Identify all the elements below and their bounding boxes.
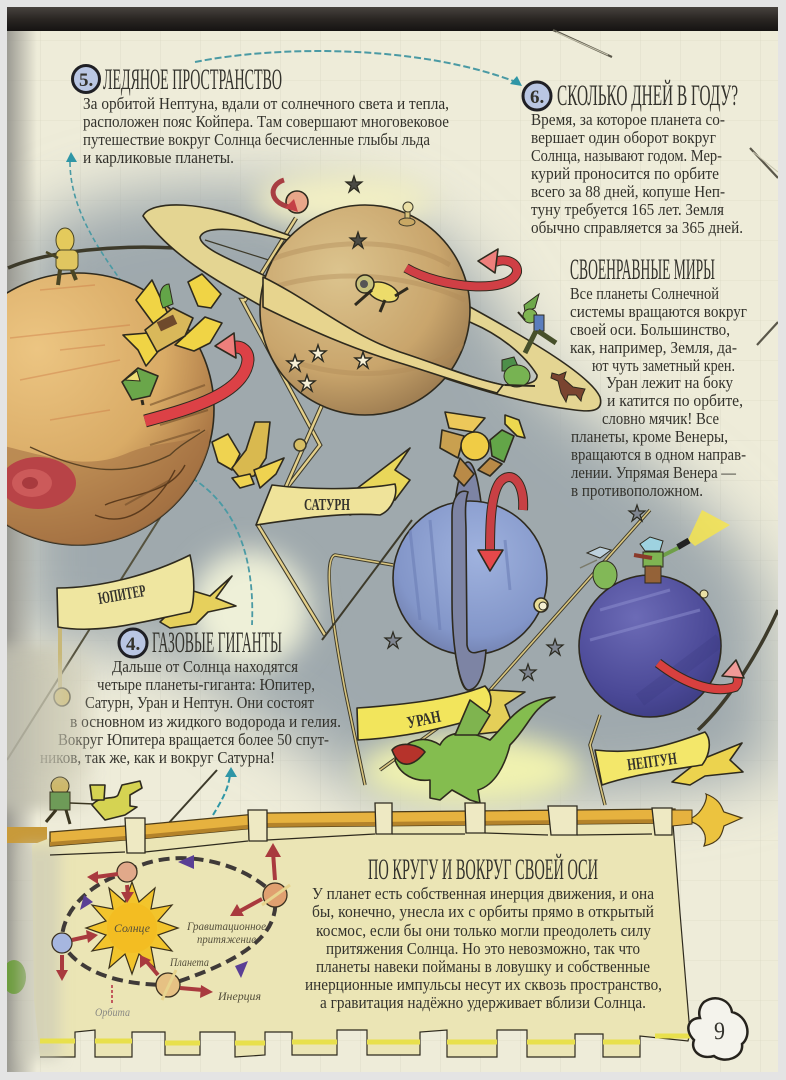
banner: Uranus [357, 686, 525, 740]
figure: gnome on staff [580, 547, 617, 589]
text block: days in a year: Время, за которое планета со- [531, 110, 725, 129]
text block: orbit and gravity [305, 884, 662, 1012]
page number cloud: 9 [714, 1018, 725, 1045]
section 4 number badge [119, 629, 147, 657]
labels: Гравитационное [186, 919, 267, 933]
figure: winged bird [212, 422, 284, 488]
banner: Saturn [256, 448, 410, 525]
section 6 number badge [523, 82, 551, 110]
red arrow heads [121, 892, 134, 903]
text block: days in a year: курий проносится по орбите [531, 164, 719, 183]
rod end at left [7, 827, 47, 843]
panel body [32, 811, 690, 1057]
bottom stripes [40, 1036, 690, 1043]
left planet [52, 933, 72, 953]
green creature at page edge [2, 960, 26, 994]
figure: dog on ring [551, 372, 585, 402]
text block: gas giants: Дальше от Солнца находятся [112, 657, 298, 676]
diagram: gravity and inertia: Орбита [95, 1005, 130, 1019]
dashed arrow: to section 5 [66, 152, 122, 282]
arrow: Saturn rotation [406, 249, 517, 286]
arrow: Jupiter rotation [145, 333, 248, 421]
arrow: Uranus rotation [478, 477, 523, 571]
rod finial [672, 810, 692, 826]
strip under rod [50, 833, 652, 855]
figure: gnome leading dog [46, 777, 95, 824]
text block: gas giants: четыре планеты-гиганта: Юпитер, [97, 675, 315, 694]
text block: wayward worlds: планеты, кроме Венеры, [571, 427, 728, 446]
banner: Jupiter: ЮПИТЕР [97, 581, 147, 608]
banner: Jupiter [57, 555, 236, 629]
axis knob [405, 206, 410, 220]
stars around Uranus [385, 505, 645, 680]
planet: Saturn [260, 176, 503, 415]
diagram: gravity and inertia: Инерция [217, 989, 261, 1003]
diagram: gravity and inertia: притяжение [197, 932, 257, 946]
text block: wayward worlds [570, 284, 747, 500]
arrow: Neptune rotation [658, 660, 744, 689]
planet: Neptune [579, 575, 721, 717]
text block: wayward worlds: и катится по орбите, [607, 391, 743, 410]
right planet [263, 883, 287, 907]
section 5 number badge: 5. [79, 70, 93, 91]
text block: days in a year: туну требуется 165 лет. Земля [531, 200, 724, 219]
small planet with arrow [273, 180, 308, 213]
text block: days in a year: вершает один оборот вокруг [531, 128, 716, 147]
text block: icy space [83, 94, 449, 167]
gutter shadow over text [0, 665, 100, 775]
figure: gnome with flashlight [634, 510, 730, 583]
text block: wayward worlds: Уран лежит на боку [606, 373, 733, 392]
dashed arrow: from scroll to section 4 [213, 767, 237, 815]
text block: wayward worlds: словно мячик! Все [602, 409, 719, 428]
figure: winged machine above Uranus [440, 412, 525, 486]
text block: orbit and gravity: У планет есть собственная инерция движения, и она [312, 884, 654, 903]
text block: orbit and gravity: инерционные импульсы несут их сквозь пространство, [305, 975, 662, 994]
text block: orbit and gravity: космос, если бы они только могли преодолеть силу [316, 921, 651, 940]
white stars [287, 345, 371, 391]
text block: icy space: расположен пояс Койпера. Там совершают многовековое [83, 112, 449, 131]
rod [50, 809, 675, 846]
text block: days in a year: Солнца, называют годом. Мер- [531, 146, 722, 165]
staff tips at page edge [553, 30, 778, 345]
top dark edge [7, 7, 778, 31]
figure: knight on Jupiter [46, 228, 78, 285]
text block: days in a year: обычно справляется за 365 дней. [531, 218, 743, 237]
Saturn ring: front band [263, 277, 503, 393]
dashed arrow: to gas giants [192, 478, 252, 625]
sun [86, 882, 178, 974]
flying machine at Jupiter [123, 274, 222, 366]
text block: wayward worlds: Все планеты Солнечной [570, 284, 719, 303]
planet: Jupiter [0, 273, 220, 560]
support poles [7, 218, 778, 847]
purple arrow heads [178, 855, 194, 869]
orbit pointer [111, 985, 113, 1003]
orbit path [62, 858, 275, 985]
text block: days in a year [531, 110, 743, 237]
text block: gas giants: в основном из жидкого водорода и гелия. [70, 712, 341, 731]
text block: gas giants [40, 657, 341, 767]
text block: wayward worlds: лении. Упрямая Венера — [571, 463, 737, 482]
red arrow shafts [62, 852, 275, 990]
text block: icy space: путешествие вокруг Солнца бесчисленные глыбы льда [83, 130, 430, 149]
diagram: gravity and inertia: Солнце [114, 921, 151, 935]
diagram: gravity and inertia: Планета [169, 955, 209, 969]
text: ГАЗОВЫЕ ГИГАНТЫ [152, 626, 282, 659]
banner: Uranus: УРАН [405, 707, 442, 732]
tabs [125, 803, 672, 853]
text block: gas giants: Вокруг Юпитера вращается более 50 спут- [58, 730, 329, 749]
section 5 number badge [72, 66, 100, 92]
planet: Saturn ring (back) [143, 205, 601, 411]
figure: elf on Jupiter [122, 368, 158, 405]
text block: wayward worlds: системы вращаются вокруг [570, 302, 747, 321]
text block: orbit and gravity: бы, конечно, унесла их с орбиты прямо в открытый [312, 902, 654, 921]
text block: wayward worlds: своей оси. Большинство, [570, 320, 730, 339]
banner: Saturn: САТУРН [304, 495, 350, 514]
text block: orbit and gravity: а гравитация надёжно удерживает вблизи Солнца. [320, 993, 646, 1012]
text block: wayward worlds: ют чуть заметный крен. [592, 356, 735, 375]
text block: days in a year: всего за 88 дней, копуше Неп- [531, 182, 725, 201]
text block: icy space: За орбитой Нептуна, вдали от солнечного света и тепла, [83, 94, 449, 113]
text block: icy space: и карликовые планеты. [83, 148, 234, 167]
figure: green dragon [392, 697, 555, 803]
dashed arrow: to section 6 [195, 51, 522, 86]
text block: wayward worlds: как, например, Земля, да- [570, 338, 737, 357]
page number cloud [688, 998, 747, 1060]
banner: Neptune: НЕПТУН [626, 749, 678, 774]
top planet [117, 862, 137, 882]
banner: Neptune [595, 732, 743, 785]
section 4 number badge: 4. [126, 634, 140, 655]
scroll panel [20, 794, 742, 1060]
text block: wayward worlds: вращаются в одном направ- [571, 445, 746, 464]
bottom planet [156, 973, 180, 997]
text block: wayward worlds: в противоположном. [571, 481, 703, 500]
section 6 number badge: 6. [530, 87, 544, 108]
diagram: gravity and inertia [52, 843, 290, 1019]
figure: elf sitting on ring [502, 357, 535, 387]
text block: gas giants: ников, так же, как и вокруг Сатурна! [40, 748, 275, 767]
figure: diver on Saturn [355, 275, 408, 312]
text block: orbit and gravity: притяжения Солнца. Но это невозможно, так что [326, 939, 640, 958]
text block: orbit and gravity: планеты навеки пойманы в ловушку и собственные [316, 957, 650, 976]
text: ЛЕДЯНОЕ ПРОСТРАНСТВО [103, 63, 282, 96]
planet: Uranus [393, 462, 548, 690]
figure: elf running on ring [518, 294, 556, 353]
Uranus ring: front [452, 491, 486, 690]
dark stars [346, 176, 366, 248]
text block: gas giants: Сатурн, Уран и Нептун. Они состоят [85, 693, 314, 712]
figure: yellow dog [90, 781, 142, 820]
